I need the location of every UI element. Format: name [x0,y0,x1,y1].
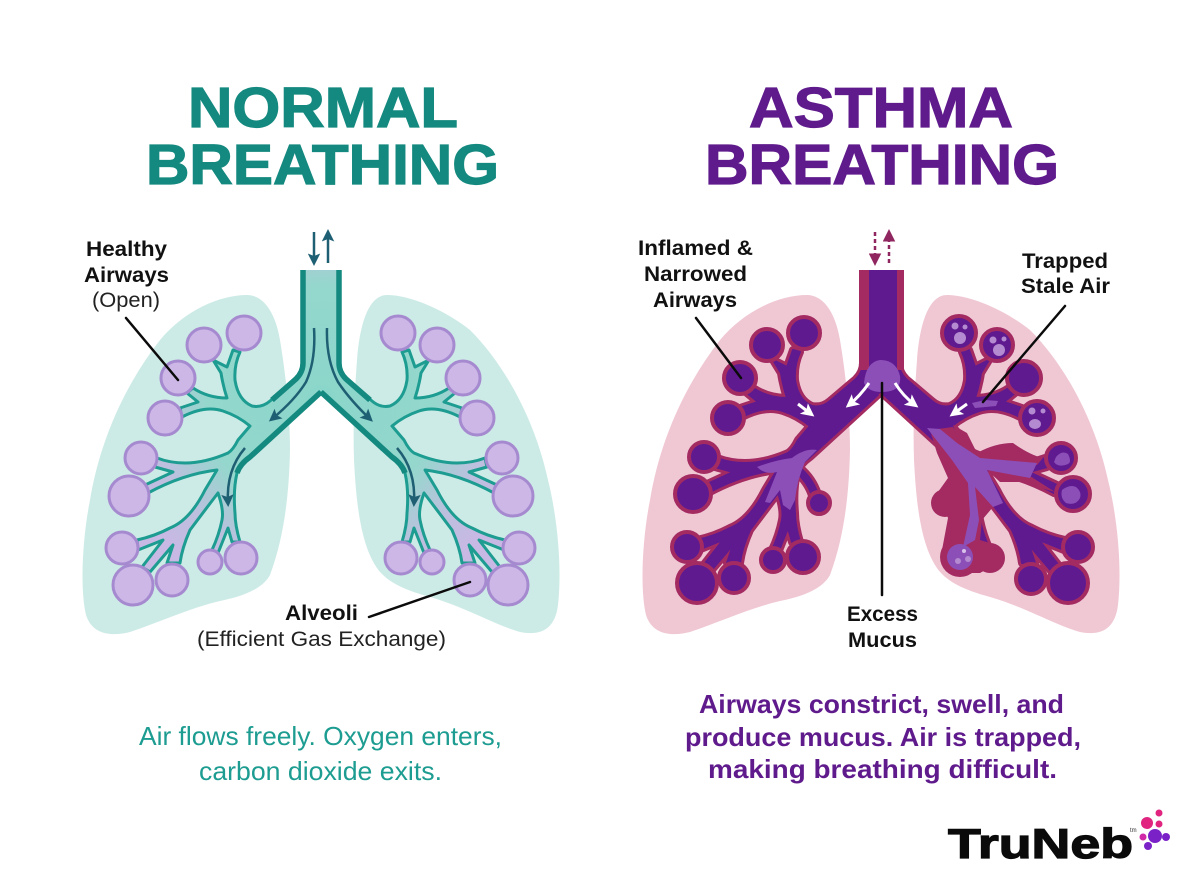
label: healthy airways: (Open) [92,289,160,312]
panel: asthma lungs diagram [643,232,1120,634]
heading: normal breathing [146,76,499,197]
label: inflamed and narrowed airways [638,237,753,378]
heading: asthma breathing: ASTHMA [749,76,1013,140]
logo: TruNeb: TruNeb [948,820,1133,867]
left lung tissue [643,295,850,634]
label: alveoli: (Efficient Gas Exchange) [197,628,446,651]
icon: dashed in/out air arrows [875,232,889,263]
constricted airflow arrows [798,383,967,414]
icon: molecule dots [1140,810,1170,850]
label: inflamed and narrowed airways: Narrowed [644,263,747,286]
heading: normal breathing: NORMAL [188,76,458,140]
label: healthy airways [84,238,178,380]
logo: TruNeb: tm [1130,828,1137,834]
caption: normal breathing: Air flows freely. Oxygen enters, [139,721,502,751]
label: alveoli [197,582,470,651]
caption: asthma breathing: making breathing difficult. [708,754,1057,784]
airway tree left [137,270,321,572]
alveoli left [106,316,261,605]
label: excess mucus [847,383,918,652]
label: healthy airways: Healthy [86,238,167,261]
inflamed tissue right lobe [930,425,1055,577]
label: alveoli: Alveoli [285,602,358,625]
heading: asthma breathing: BREATHING [705,133,1059,197]
label: excess mucus: Mucus [848,629,917,652]
trapped air bubbles [952,322,1046,564]
label: healthy airways: Airways [84,264,169,287]
excess mucus deposits [757,360,1080,570]
heading: normal breathing: BREATHING [146,133,499,197]
panel: normal lungs diagram [83,232,560,634]
airway tree right [321,270,505,572]
airway tree right [881,270,1065,572]
label: trapped stale air [983,250,1110,402]
label: trapped stale air: Trapped [1022,250,1108,273]
heading: asthma breathing [705,76,1059,197]
caption: asthma breathing: Airways constrict, swell, and [699,689,1064,719]
alveoli right [942,316,1093,603]
alveoli right [381,316,535,605]
trachea [859,270,904,375]
caption: asthma breathing [685,689,1081,784]
label: inflamed and narrowed airways: Airways [653,289,737,312]
label: inflamed and narrowed airways: Inflamed & [638,237,753,260]
right lung tissue [914,295,1120,633]
alveoli left [672,317,830,603]
caption: asthma breathing: produce mucus. Air is trapped, [685,722,1081,752]
airway tree left [697,270,881,572]
label: trapped stale air: Stale Air [1021,275,1110,298]
caption: normal breathing [139,721,502,786]
icon: in/out air arrows [314,232,328,263]
left lung tissue [83,295,290,634]
airflow arrows in trachea and bronchi [228,328,414,503]
right lung tissue [354,295,560,633]
label: excess mucus: Excess [847,603,918,626]
logo: TruNeb [948,810,1170,867]
caption: normal breathing: carbon dioxide exits. [199,756,442,786]
